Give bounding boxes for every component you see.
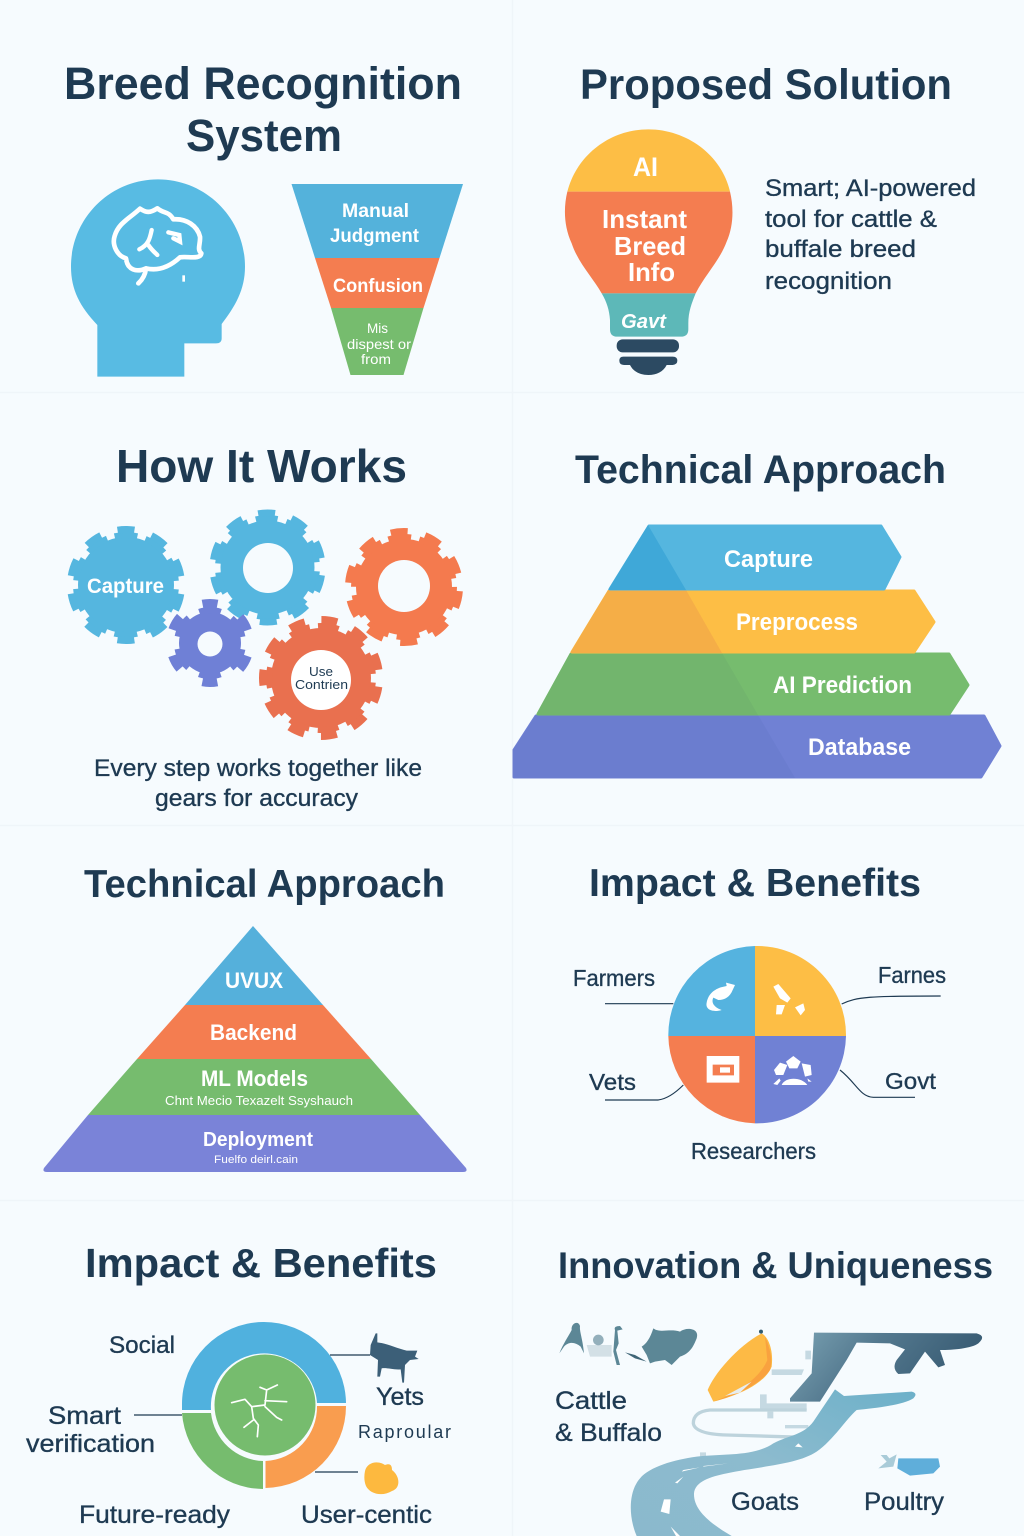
ring labels: Raproular bbox=[358, 1422, 451, 1442]
animal silhouettes bbox=[559, 1323, 584, 1353]
icon: light bulb bbox=[565, 129, 732, 375]
panel: breed recognition system bbox=[64, 58, 463, 377]
title: breed recognition system: Breed Recognition bbox=[64, 58, 462, 109]
illustration: roadmap bbox=[559, 1323, 982, 1536]
category labels: Goats bbox=[731, 1488, 799, 1516]
icon: capture gear: Capture bbox=[87, 575, 164, 598]
category labels bbox=[555, 1387, 945, 1516]
ring labels: Yets bbox=[376, 1383, 424, 1411]
icon: purple gear bbox=[164, 597, 256, 689]
layer: preprocess: Preprocess bbox=[736, 609, 858, 636]
icon: orange gear bbox=[337, 520, 471, 654]
leader lines bbox=[134, 1355, 370, 1472]
title: impact and benefits: Impact & Benefits bbox=[589, 862, 921, 905]
icon: cow bbox=[370, 1333, 419, 1383]
panel: innovation and uniqueness bbox=[555, 1245, 993, 1536]
chart: funnel bbox=[292, 184, 463, 375]
description text: tool for cattle & bbox=[765, 206, 937, 233]
layer: ml models: ML Models bbox=[201, 1066, 308, 1091]
bulb labels: Info bbox=[628, 257, 675, 287]
layer: deployment: Fuelfo deirl.cain bbox=[214, 1154, 298, 1166]
chart: funnel: Judgment bbox=[330, 226, 420, 247]
ring labels bbox=[26, 1332, 451, 1529]
pie labels: Govt bbox=[885, 1068, 937, 1094]
layer: deployment bbox=[43, 1115, 467, 1172]
chart: stakeholder pie bbox=[668, 946, 846, 1123]
chart: funnel: Manual bbox=[342, 201, 409, 222]
orange leaf bbox=[708, 1333, 772, 1402]
layer: capture: Capture bbox=[724, 546, 813, 573]
pie labels bbox=[573, 962, 946, 1164]
icon: light connector shapes bbox=[693, 1351, 811, 1457]
layer: ml models bbox=[88, 1059, 420, 1115]
chart: funnel: dispest or bbox=[347, 336, 411, 352]
icon: head with brain bbox=[71, 179, 245, 377]
caption: Every step works together like bbox=[94, 755, 422, 782]
title: how it works: How It Works bbox=[116, 440, 407, 492]
bulb labels: Instant bbox=[602, 204, 687, 234]
pie labels: Farmers bbox=[573, 965, 655, 991]
ring labels: Future-ready bbox=[79, 1501, 231, 1529]
road bbox=[631, 1389, 915, 1536]
layer: ai prediction: AI Prediction bbox=[773, 672, 912, 699]
category labels: Cattle bbox=[555, 1387, 627, 1415]
chart: funnel: Confusion bbox=[333, 276, 423, 297]
description text: buffale breed bbox=[765, 236, 916, 263]
icon: blue gear bbox=[204, 504, 331, 631]
poultry mark bbox=[897, 1458, 940, 1476]
bulb labels: AI bbox=[633, 152, 658, 182]
panel: technical approach layered arrows bbox=[513, 448, 1000, 778]
chart: funnel: from bbox=[361, 351, 391, 367]
description text: Smart; AI-powered bbox=[765, 175, 976, 202]
ring labels: verification bbox=[26, 1430, 155, 1458]
bulb labels: Gavt bbox=[621, 311, 667, 333]
title: technical approach: Technical Approach bbox=[575, 448, 946, 492]
chart: funnel: Mis bbox=[367, 320, 388, 336]
ring labels: User-centic bbox=[301, 1501, 432, 1529]
layer: uvux bbox=[185, 926, 323, 1005]
title: technical approach: Technical Approach bbox=[84, 863, 445, 906]
layer: uvux: UVUX bbox=[225, 968, 283, 993]
title: impact and benefits: Impact & Benefits bbox=[85, 1240, 437, 1286]
title: innovation and uniqueness: Innovation & Uniqueness bbox=[558, 1245, 993, 1286]
pie labels: Farnes bbox=[878, 962, 946, 988]
bulb labels bbox=[602, 152, 687, 333]
pie labels: Researchers bbox=[691, 1138, 816, 1164]
layer: ai prediction bbox=[536, 653, 968, 715]
bulb labels: Breed bbox=[614, 231, 686, 261]
ring labels: Smart bbox=[48, 1402, 121, 1430]
title: breed recognition system: System bbox=[186, 110, 342, 161]
layer: database bbox=[513, 715, 1000, 778]
category labels: Poultry bbox=[864, 1488, 945, 1516]
layer: database: Database bbox=[808, 734, 911, 761]
leader lines bbox=[605, 996, 941, 1100]
layer: capture bbox=[608, 525, 900, 590]
layer: preprocess bbox=[570, 590, 934, 653]
icon: use gear: Contrien bbox=[295, 677, 348, 692]
panel: impact and benefits ring bbox=[26, 1240, 451, 1529]
description text bbox=[765, 175, 976, 295]
ring labels: Social bbox=[109, 1332, 175, 1359]
title: proposed solution: Proposed Solution bbox=[580, 61, 952, 109]
layer: ml models: Chnt Mecio Texazelt Ssyshauch bbox=[165, 1093, 353, 1108]
pie labels: Vets bbox=[589, 1069, 636, 1095]
caption: gears for accuracy bbox=[155, 785, 358, 812]
chart: ring diagram bbox=[182, 1322, 346, 1489]
panel: how it works bbox=[63, 440, 471, 812]
icon: orange blob bbox=[364, 1462, 398, 1494]
panel: proposed solution bbox=[565, 61, 976, 375]
title: breed recognition system bbox=[64, 58, 462, 161]
layer: backend: Backend bbox=[210, 1020, 297, 1045]
layer: deployment: Deployment bbox=[203, 1129, 313, 1151]
panel: technical approach pyramid bbox=[43, 863, 467, 1172]
description text: recognition bbox=[765, 268, 892, 295]
panel: impact and benefits pie bbox=[573, 862, 946, 1164]
dark pathway bbox=[790, 1333, 982, 1402]
layer: backend bbox=[137, 1005, 371, 1059]
caption bbox=[94, 755, 422, 812]
icon: capture gear bbox=[63, 522, 189, 648]
icon: use gear bbox=[263, 620, 379, 736]
category labels: & Buffalo bbox=[555, 1419, 662, 1447]
icon: use gear: Use bbox=[309, 664, 333, 679]
